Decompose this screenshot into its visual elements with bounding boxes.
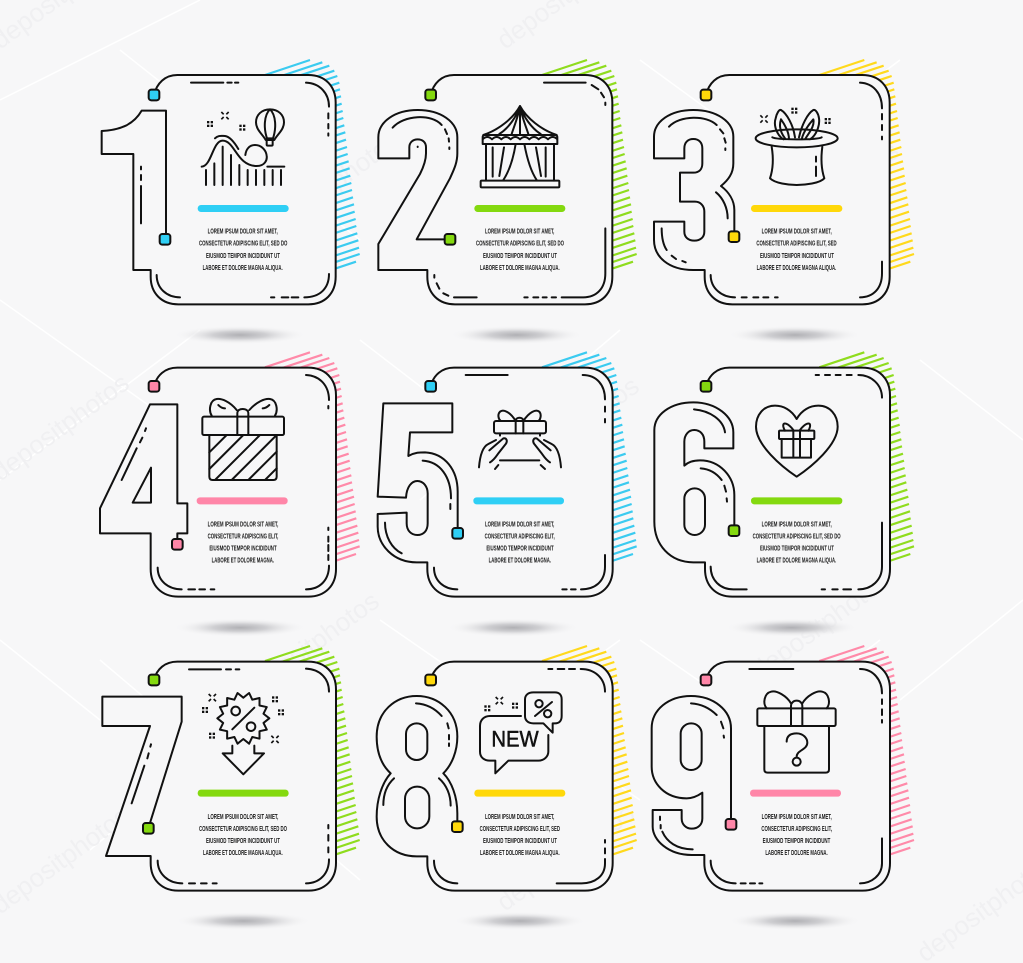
- shadow: [453, 912, 587, 930]
- shadow: [175, 912, 312, 930]
- text block: [761, 814, 832, 857]
- outline with digit 5: [378, 368, 613, 597]
- text block: EIUSMOD TEMPOR INCIDIDUNT UT: [760, 253, 834, 260]
- node bottom: [729, 231, 739, 242]
- panel 7: discount badge: [102, 646, 360, 930]
- outline with digit 2: [378, 75, 612, 304]
- colour bar: [751, 205, 842, 212]
- panel 8: new offer bubbles: [377, 646, 637, 930]
- icon: new and percent bubbles: [480, 692, 562, 773]
- outline with digit 3: [654, 75, 890, 304]
- text block: EIUSMOD TEMPOR INCIDIDUNT: [486, 545, 554, 552]
- outline with digit 7: [102, 662, 336, 891]
- text block: CONSECTETUR ADIPISCING ELIT,: [485, 533, 555, 540]
- text block: CONSECTETUR ADIPISCING ELIT, SED DO: [199, 826, 287, 833]
- node bottom: [172, 539, 183, 550]
- node top: [149, 90, 159, 100]
- colour bar: [751, 497, 842, 504]
- icon: roller coaster and balloon: [202, 109, 284, 185]
- stripes: [542, 60, 637, 278]
- text block: CONSECTETUR ADIPISCING ELIT, SED DO: [199, 241, 288, 248]
- text block: LOREM IPSUM DOLOR SIT AMET,: [762, 521, 832, 528]
- node top: [149, 675, 159, 685]
- text block: LOREM IPSUM DOLOR SIT AMET,: [208, 814, 278, 821]
- text block: LOREM IPSUM DOLOR SIT AMET,: [485, 814, 554, 821]
- text block: LABORE ET DOLORE MAGNA ALIQUA.: [203, 265, 283, 272]
- text block: EIUSMOD TEMPOR INCIDIDUNT: [763, 838, 831, 845]
- shadow: [173, 326, 307, 344]
- text block: CONSECTETUR ADIPISCING ELIT, SED DO: [476, 241, 564, 248]
- text block: [480, 814, 560, 857]
- outline with digit 6: [654, 368, 890, 597]
- colour bar: [473, 497, 564, 504]
- text block: LOREM IPSUM DOLOR SIT AMET,: [762, 814, 832, 821]
- icon: heart with gift: [756, 406, 838, 477]
- icon: hat with rabbit ears: [756, 108, 838, 185]
- outline with digit 9: [652, 662, 890, 891]
- node bottom: [726, 819, 736, 830]
- node top: [425, 675, 436, 685]
- watermark pattern: depositphotos: [756, 135, 905, 255]
- shadow: [728, 912, 862, 930]
- digit 9 counter: [681, 723, 702, 770]
- node bottom: [160, 234, 170, 245]
- text block: [756, 229, 837, 272]
- colour bar: [474, 790, 565, 797]
- accent dashes: [132, 669, 329, 883]
- stripes: [819, 646, 914, 864]
- icon: gift with question mark: [757, 691, 836, 773]
- text block: LABORE ET DOLORE MAGNA ALIQUA.: [203, 850, 283, 857]
- text block: LOREM IPSUM DOLOR SIT AMET,: [485, 229, 554, 236]
- accent dashes: [383, 669, 605, 883]
- panel 9: mystery gift: [652, 646, 914, 930]
- colour bar: [197, 497, 288, 504]
- accent dashes: [662, 83, 882, 297]
- node bottom: [729, 525, 739, 536]
- panel 1: roller coaster: [102, 60, 360, 344]
- text block: CONSECTETUR ADIPISCING ELIT,: [208, 533, 278, 540]
- stripes: [265, 646, 360, 864]
- node top: [701, 675, 711, 685]
- icon: striped gift: [202, 399, 284, 480]
- node bottom: [445, 234, 455, 245]
- panel 5: gift in hands: [378, 352, 637, 637]
- shadow: [447, 618, 580, 637]
- text block: EIUSMOD TEMPOR INCIDIDUNT UT: [760, 545, 834, 552]
- text block: CONSECTETUR ADIPISCING ELIT, SED: [756, 241, 837, 248]
- watermark pattern: depositphotos: [496, 370, 645, 490]
- watermark pattern: depositphotos: [746, 565, 895, 685]
- digit 8 upper counter: [406, 723, 427, 760]
- colour bar: [198, 790, 289, 797]
- outline with digit 8: [377, 662, 613, 891]
- text block: [199, 814, 287, 857]
- panels grid: [100, 60, 914, 930]
- text block: LABORE ET DOLORE MAGNA ALIQUA.: [757, 558, 836, 565]
- text block: LOREM IPSUM DOLOR SIT AMET,: [762, 229, 832, 236]
- node top: [701, 90, 711, 100]
- shadow: [173, 618, 307, 637]
- text block: LABORE ET DOLORE MAGNA ALIQUA.: [480, 265, 560, 272]
- text block: LOREM IPSUM DOLOR SIT AMET,: [485, 521, 554, 528]
- colour bar: [198, 205, 289, 212]
- accent dashes: [122, 375, 329, 589]
- text block: CONSECTETUR ADIPISCING ELIT, SED: [480, 826, 560, 833]
- watermark pattern: depositphotos: [236, 585, 385, 705]
- panel 3: magic hat: [654, 60, 914, 344]
- accent dashes: [385, 375, 605, 589]
- shadow: [725, 618, 858, 637]
- digit 8 lower counter: [405, 787, 429, 828]
- node top: [425, 90, 436, 100]
- icon: hands holding gift: [479, 411, 561, 469]
- text block: CONSECTETUR ADIPISCING ELIT, SED DO: [753, 533, 841, 540]
- text block: LABORE ET DOLORE MAGNA ALIQUA.: [757, 265, 836, 272]
- accent dashes: [694, 375, 882, 589]
- digit 6 counter: [684, 488, 705, 535]
- icon: circus tent: [481, 106, 559, 187]
- outline with digit 1: [102, 75, 336, 304]
- node bottom: [452, 528, 463, 539]
- outline with digit 4: [100, 368, 336, 597]
- text block: LABORE ET DOLORE MAGNA.: [212, 558, 274, 565]
- text block: LABORE ET DOLORE MAGNA ALIQUA.: [480, 850, 560, 857]
- stripes: [265, 352, 360, 571]
- watermark pattern: depositphotos: [491, 797, 640, 917]
- accent dashes: [660, 669, 882, 883]
- stripes: [265, 60, 360, 278]
- text block: [208, 521, 278, 565]
- text block: [199, 229, 288, 272]
- icon: new and percent bubbles: NEW: [491, 727, 539, 752]
- node bottom: [452, 821, 463, 832]
- node bottom: [143, 823, 154, 834]
- digit 4 counter: [133, 468, 151, 503]
- panel 2: circus tent: [378, 60, 637, 344]
- shadow: [728, 326, 862, 344]
- text block: EIUSMOD TEMPOR INCIDIDUNT UT: [483, 253, 557, 260]
- text block: EIUSMOD TEMPOR INCIDIDUNT UT: [206, 253, 280, 260]
- text block: [485, 521, 555, 565]
- text block: [753, 521, 841, 565]
- text block: LOREM IPSUM DOLOR SIT AMET,: [208, 521, 278, 528]
- stripes: [819, 60, 914, 278]
- text block: EIUSMOD TEMPOR INCIDIDUNT: [209, 545, 277, 552]
- accent dashes: [393, 83, 605, 297]
- watermark pattern: depositphotos: [256, 125, 405, 245]
- panel 4: gift box: [100, 352, 360, 637]
- colour bar: [474, 205, 565, 212]
- shadow: [450, 326, 583, 344]
- panel 6: heart gift: [654, 352, 914, 637]
- text block: LABORE ET DOLORE MAGNA.: [765, 850, 828, 857]
- stripes: [819, 352, 914, 571]
- accent dashes: [141, 83, 329, 297]
- node top: [149, 381, 159, 392]
- colour bar: [750, 790, 841, 797]
- text block: EIUSMOD TEMPOR INCIDIDUNT UT: [483, 838, 557, 845]
- text block: LABORE ET DOLORE MAGNA.: [489, 558, 551, 565]
- node top: [425, 381, 436, 392]
- stripes: [542, 646, 637, 864]
- node top: [701, 381, 711, 392]
- text block: LOREM IPSUM DOLOR SIT AMET,: [208, 229, 278, 236]
- icon: percent badge with arrow: [202, 693, 284, 774]
- text block: [476, 229, 564, 272]
- text block: CONSECTETUR ADIPISCING ELIT,: [761, 826, 832, 833]
- stripes: [542, 352, 637, 571]
- text block: EIUSMOD TEMPOR INCIDIDUNT UT: [206, 838, 280, 845]
